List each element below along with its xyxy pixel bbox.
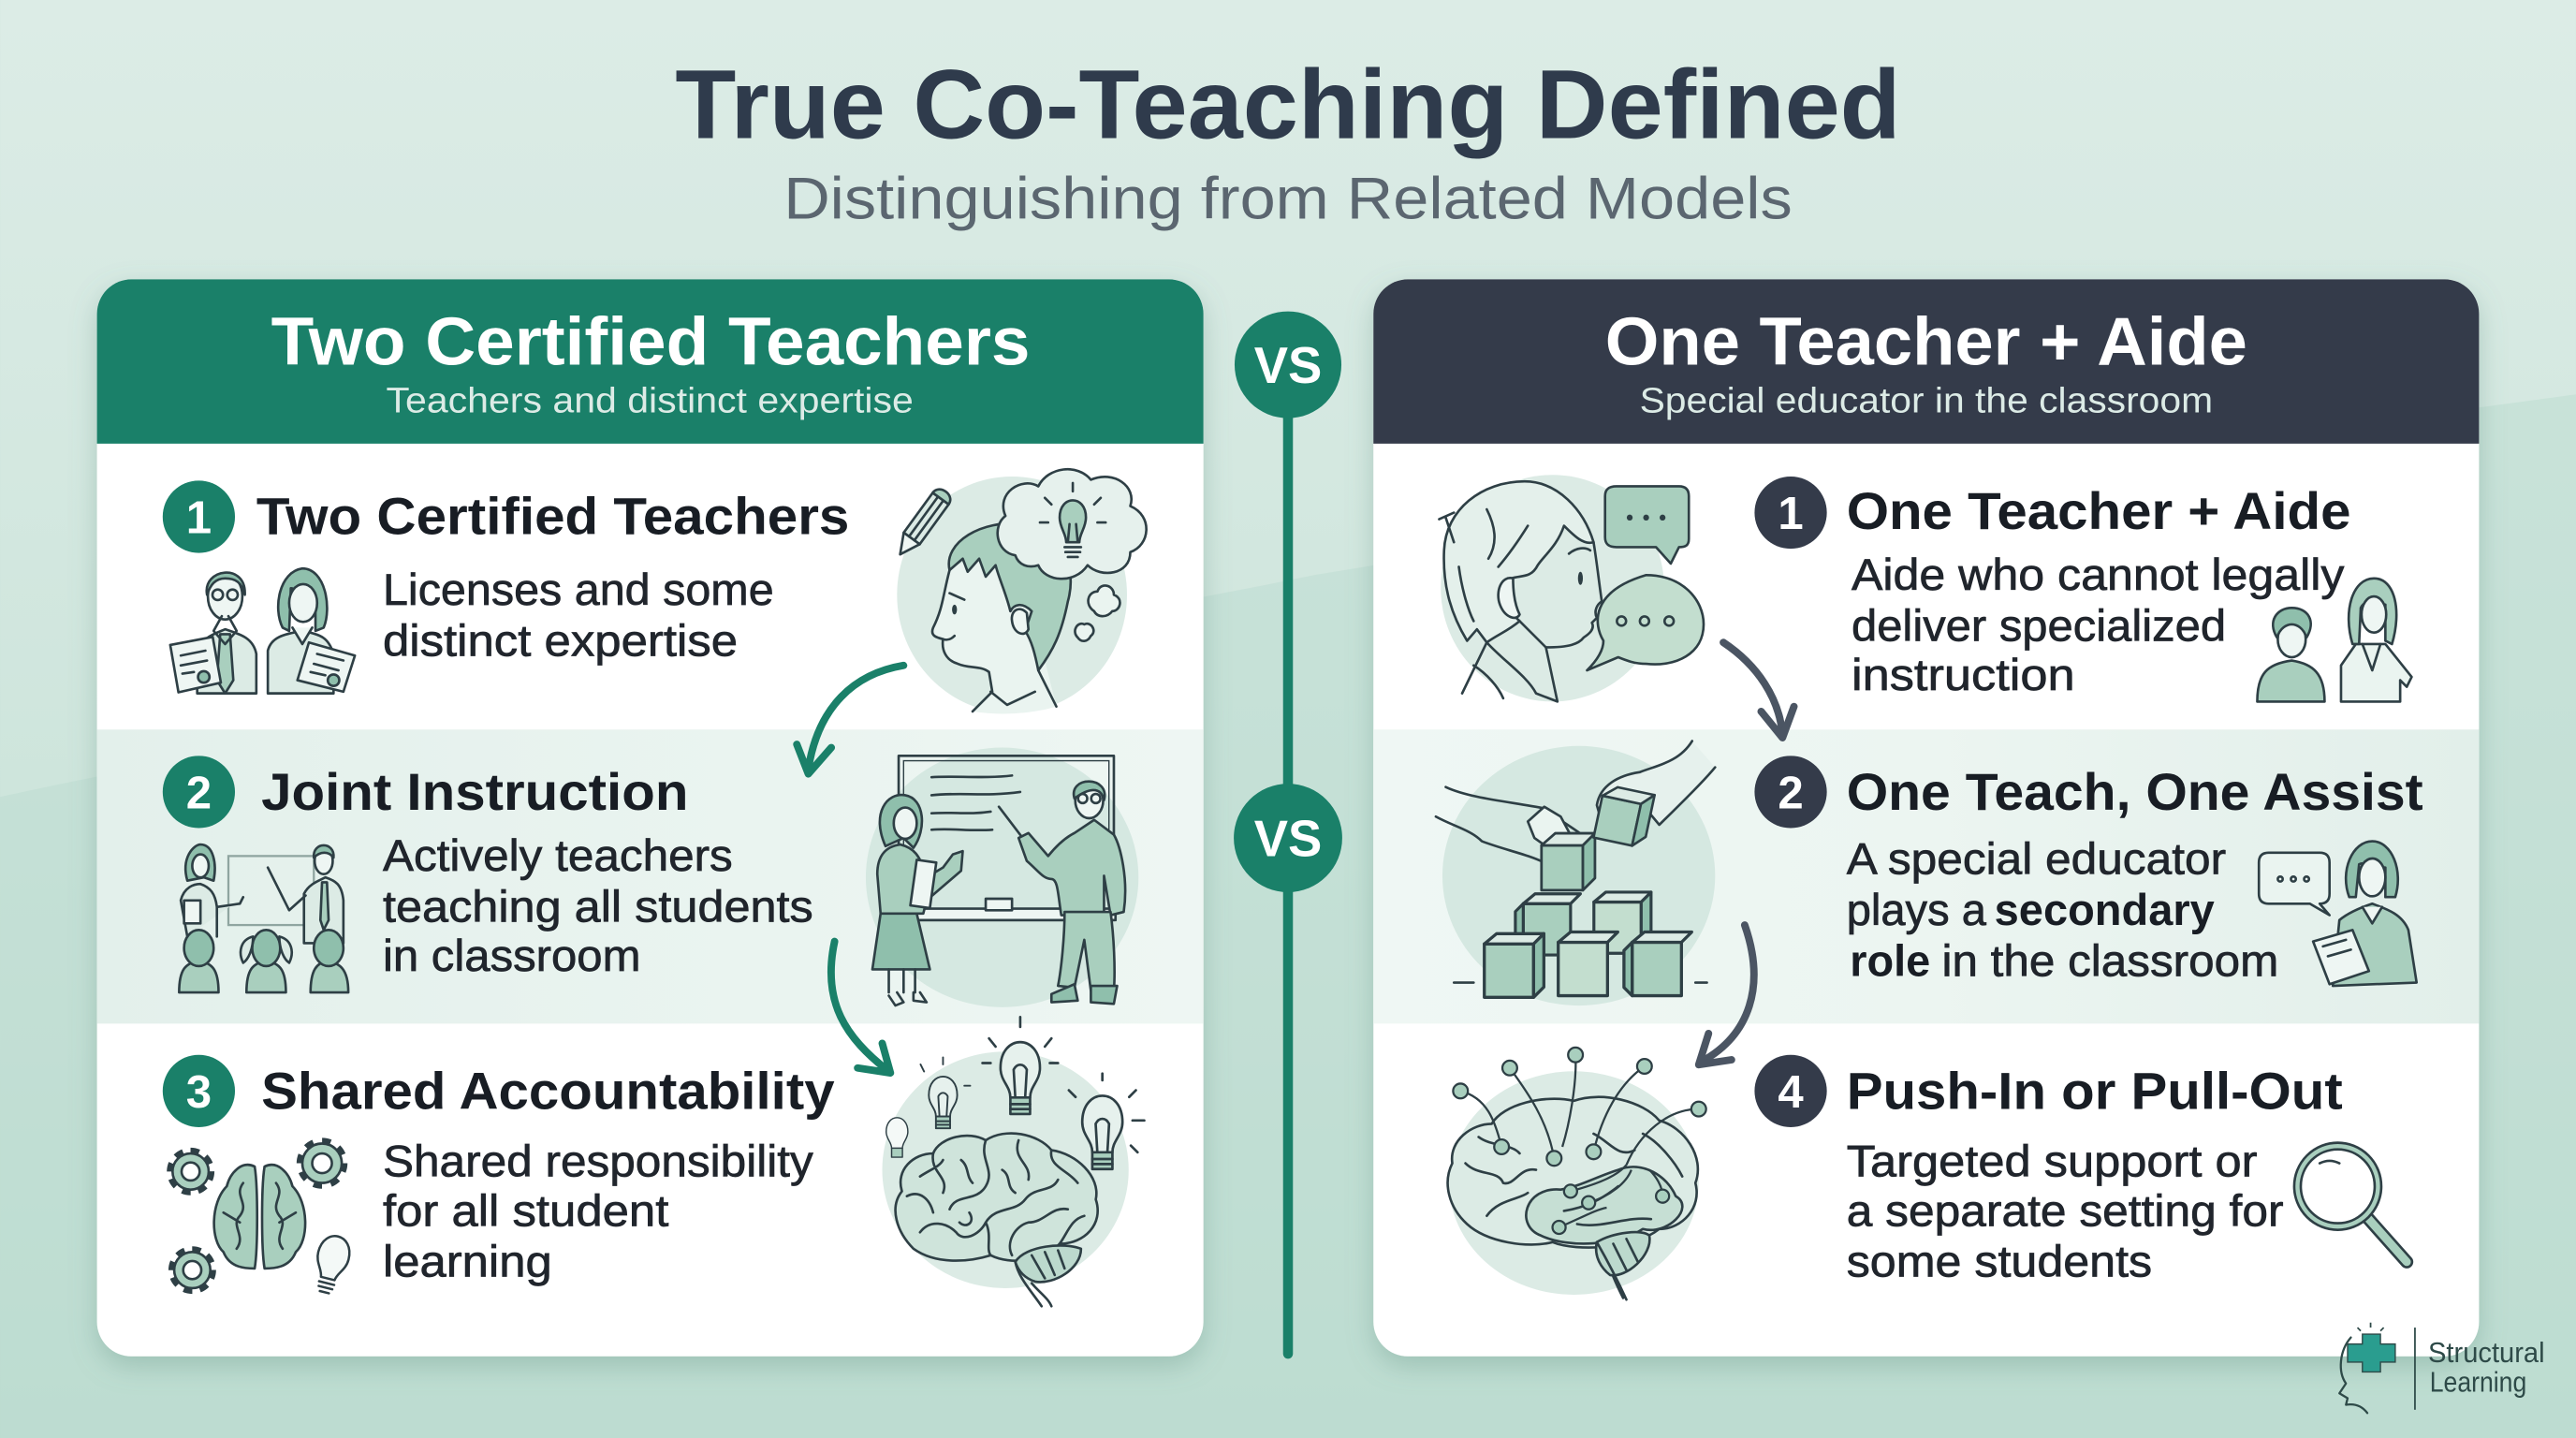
arrow: right step 1 to step 2 (1723, 642, 1794, 738)
illustration: two teachers at a whiteboard (866, 748, 1138, 1007)
step 4 body: Targeted support or (1847, 1137, 2257, 1187)
step 1 body: deliver specialized (1852, 601, 2226, 651)
icon: two teachers in front of students (179, 844, 348, 992)
header: one teacher plus aide: Special educator in the classroom (1640, 381, 2213, 420)
panel: two certified teachers (97, 279, 1204, 1357)
step 1 heading: Two Certified Teachers (256, 487, 849, 545)
step 2 body (383, 831, 813, 981)
step 2 body: Actively teachers (383, 831, 733, 881)
step 2 badge (163, 756, 235, 829)
vs badge middle (1234, 784, 1342, 892)
step 1 body (1852, 550, 2345, 700)
step 2 body: in classroom (383, 932, 641, 981)
icon: gears, split brain and bulb (171, 1142, 354, 1296)
icon: two teachers holding certificates (170, 568, 355, 694)
step 2 badge (1754, 756, 1827, 829)
step 1 badge: 1 (1778, 489, 1804, 539)
step 4 heading: Push-In or Pull-Out (1847, 1063, 2343, 1121)
logo: Structural Learning: Structural (2428, 1336, 2545, 1369)
arrow: step 2 to step 3 (831, 942, 890, 1073)
illustration: child thinking with light bulb (892, 469, 1147, 713)
step 1 badge: 1 (186, 493, 212, 544)
vs badge middle: VS (1254, 810, 1322, 867)
step 4 body: a separate setting for (1847, 1186, 2284, 1236)
logo: Structural Learning (2339, 1323, 2545, 1413)
step 2 heading: Joint Instruction (261, 763, 688, 821)
step 2 body: role (1850, 936, 1930, 986)
header: one teacher plus aide (1373, 279, 2479, 444)
step 2 body (1847, 835, 2278, 986)
step 2 body: plays a (1847, 886, 1987, 935)
step 3 body: learning (383, 1238, 552, 1287)
step 1 body: Licenses and some (383, 565, 774, 615)
step 3 body: Shared responsibility (383, 1137, 813, 1187)
step 1 body: Aide who cannot legally (1852, 550, 2345, 600)
illustration: hands stacking blocks (1436, 741, 1715, 1005)
icon: aide with student (2257, 579, 2411, 701)
icon: magnifying glass (2297, 1146, 2407, 1262)
step 4 badge (1754, 1055, 1827, 1127)
step 4 body: some students (1847, 1238, 2152, 1287)
header: two certified teachers (97, 279, 1204, 444)
illustration: brain with connected nodes (1448, 1048, 1706, 1299)
illustration: child speaking with speech bubbles (1439, 475, 1704, 701)
step 2 body: in the classroom (1942, 936, 2278, 986)
step 1 badge (163, 480, 235, 553)
step 4 body (1847, 1137, 2284, 1287)
panel: one teacher plus aide (1373, 279, 2479, 1357)
step 2 body: A special educator (1847, 835, 2226, 885)
step 3 heading: Shared Accountability (261, 1063, 835, 1121)
header: two certified teachers: Teachers and distinct expertise (386, 381, 914, 420)
logo: Structural Learning: Learning (2430, 1366, 2526, 1399)
title: True Co-Teaching Defined (675, 50, 1901, 159)
row 2 band (1373, 729, 2479, 1023)
step 2 body: teaching all students (383, 883, 813, 932)
step 1 body: instruction (1852, 651, 2075, 700)
step 4 badge: 4 (1778, 1067, 1804, 1118)
header: one teacher plus aide: One Teacher + Aide (1605, 305, 2247, 380)
step 2 heading: One Teach, One Assist (1847, 763, 2423, 821)
vs badge top (1235, 312, 1341, 418)
step 1 body: distinct expertise (383, 616, 738, 666)
arrow: step 1 to step 2 (797, 666, 903, 774)
step 2 badge: 2 (1778, 768, 1804, 818)
step 1 badge (1754, 477, 1827, 549)
illustration: brain with light bulbs (883, 1017, 1144, 1306)
step 3 badge: 3 (186, 1067, 212, 1118)
vs divider (1234, 312, 1342, 1358)
step 2 body: secondary (1995, 886, 2215, 935)
vs badge top: VS (1254, 337, 1322, 394)
step 2 badge: 2 (186, 768, 212, 818)
row 2 band (97, 729, 1204, 1023)
step 3 body: for all student (383, 1186, 668, 1236)
step 3 badge (163, 1055, 235, 1127)
subtitle: Distinguishing from Related Models (783, 166, 1793, 231)
header: two certified teachers: Two Certified Teachers (271, 305, 1030, 380)
icon: special educator with speech bubble and clipboard (2259, 842, 2417, 986)
step 1 heading: One Teacher + Aide (1847, 482, 2351, 540)
step 1 body (383, 565, 774, 666)
arrow: right step 2 to step 4 (1699, 925, 1754, 1064)
step 3 body (383, 1137, 813, 1287)
